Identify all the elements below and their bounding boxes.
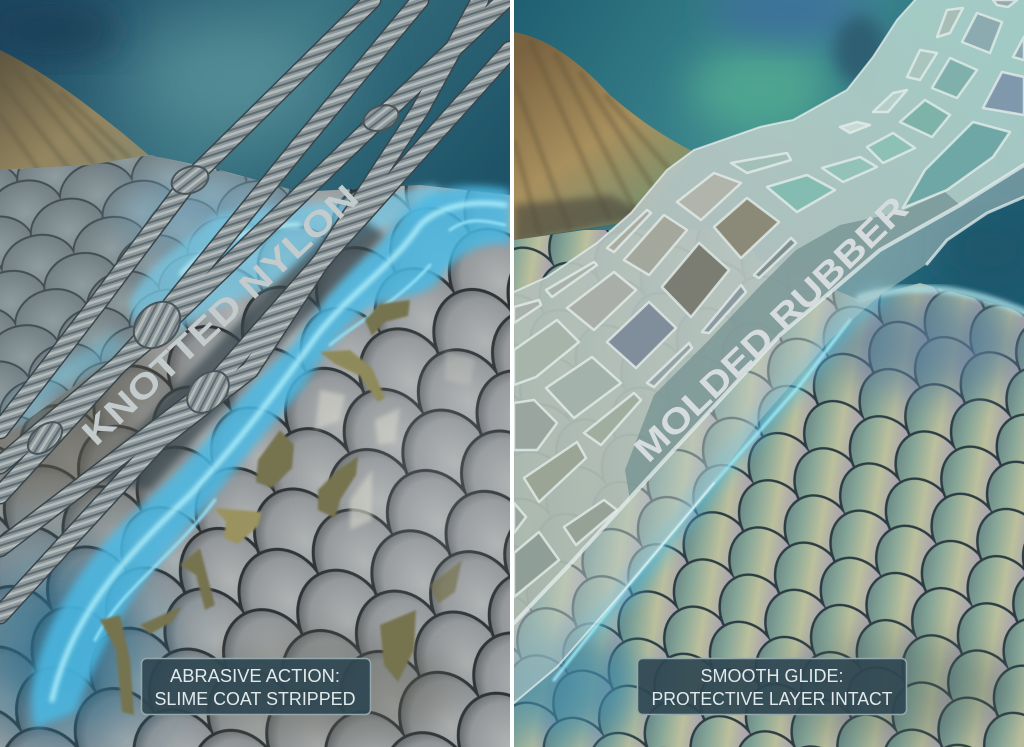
exposed damage patches bbox=[100, 300, 462, 715]
net rail highlights bbox=[514, 0, 1024, 703]
caption: smooth glide: SMOOTH GLIDE: bbox=[700, 666, 844, 686]
heading: molded rubber: MOLDED RUBBER bbox=[627, 189, 916, 470]
dark shadow behind lettering bbox=[90, 210, 385, 490]
knotted nylon ropes bbox=[0, 0, 510, 615]
iridescent fish body bbox=[500, 230, 1024, 747]
blurred water background bbox=[0, 0, 510, 195]
lettering strip bbox=[625, 192, 960, 500]
caption: abrasive action: ABRASIVE ACTION: bbox=[170, 666, 340, 686]
worn silver highlights bbox=[315, 350, 475, 530]
net windows bbox=[514, 0, 1024, 597]
blurred water background bbox=[514, 0, 1024, 312]
rope knots bbox=[22, 101, 402, 460]
panel: knotted nylon bbox=[0, 0, 520, 747]
molded rubber net bbox=[514, 0, 1024, 703]
dorsal fin bbox=[514, 32, 694, 245]
caption: abrasive action: SLIME COAT STRIPPED bbox=[154, 689, 356, 709]
caption: smooth glide: PROTECTIVE LAYER INTACT bbox=[652, 689, 892, 709]
blue slime coat bbox=[15, 185, 510, 728]
caption: abrasive action bbox=[142, 658, 370, 714]
translucent band bbox=[514, 0, 1024, 703]
caption: smooth glide bbox=[638, 658, 906, 714]
protective slime layer bbox=[554, 289, 1024, 680]
dorsal fin bbox=[0, 50, 152, 180]
solid net section bbox=[514, 0, 1024, 623]
heading: knotted nylon: KNOTTED NYLON bbox=[75, 178, 366, 453]
panel: molded rubber bbox=[500, 0, 1024, 747]
scaled fish body bbox=[0, 150, 520, 747]
